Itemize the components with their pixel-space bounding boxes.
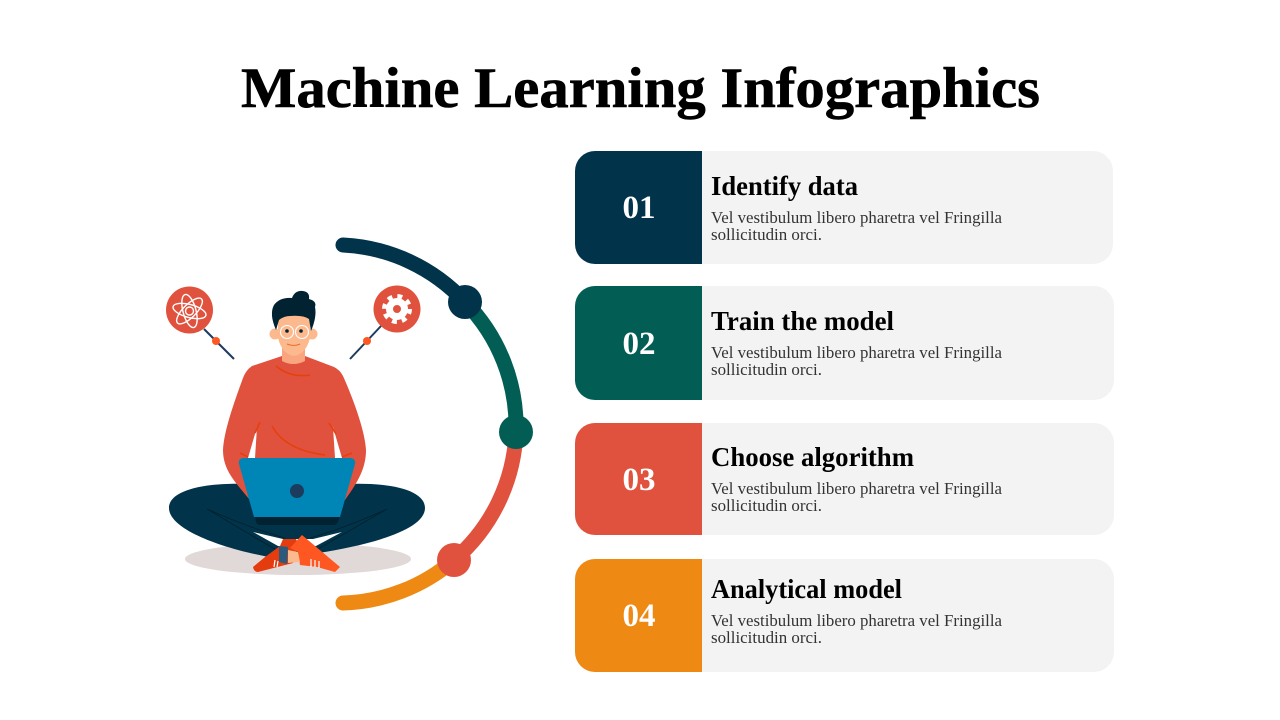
illustration: person with laptop [169,291,425,575]
panel: 02 train the model [575,286,1114,400]
panel: 04 analytical model: 04 [622,598,656,634]
legs [169,484,425,559]
panel: 01 identify data: 01 [622,190,656,226]
panel: 02 train the model: sollicitudin orci. [711,360,822,379]
panel: 03 choose algorithm: Choose algorithm [711,442,914,472]
panel: 02 train the model: Train the model [711,306,894,336]
segmented arc [343,245,533,603]
panel: 04 analytical model: sollicitudin orci. [711,628,822,647]
sweater [223,356,366,500]
panel: 03 choose algorithm: sollicitudin orci. [711,496,822,515]
panel: 03 choose algorithm: 03 [622,462,656,498]
panel: 01 identify data [575,151,1113,264]
panel: 01 identify data: Identify data [711,171,858,201]
title: Machine Learning Infographics [241,57,1040,120]
head [270,291,318,364]
panel: 01 identify data: sollicitudin orci. [711,225,822,244]
panel: 02 train the model: Vel vestibulum libero pharetra vel Fringilla [711,343,1003,362]
panel: 02 train the model: 02 [622,326,656,362]
panel: 04 analytical model [575,559,1114,672]
icon: atom with pin [166,286,234,359]
panel: 04 analytical model: Analytical model [711,574,902,604]
icon: gear with pin [350,286,420,359]
feet [253,535,340,572]
laptop [239,458,355,525]
panel: 03 choose algorithm: Vel vestibulum libero pharetra vel Fringilla [711,479,1003,498]
panel: 04 analytical model: Vel vestibulum libero pharetra vel Fringilla [711,611,1003,630]
panel: 03 choose algorithm [575,423,1114,535]
panel: 01 identify data: Vel vestibulum libero pharetra vel Fringilla [711,208,1003,227]
